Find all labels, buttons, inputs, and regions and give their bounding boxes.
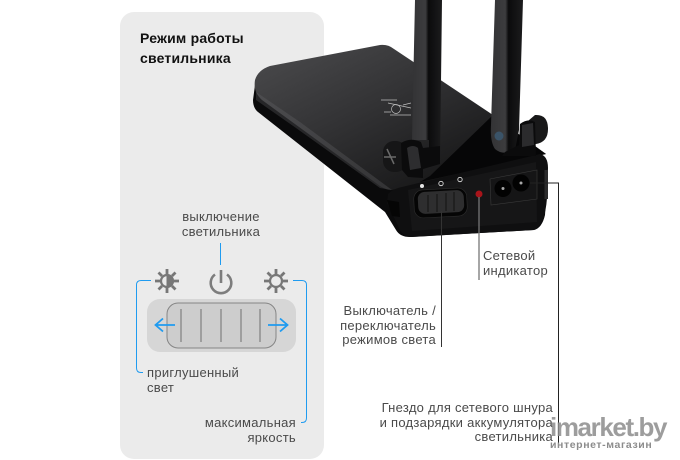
heading: light mode <box>140 30 244 66</box>
label: indicator: индикатор <box>483 262 548 278</box>
label: socket: Гнездо для сетевого шнура <box>382 400 553 415</box>
left arm <box>412 0 442 166</box>
panel: light mode <box>120 12 324 459</box>
socket <box>494 174 530 197</box>
label: dimmed light <box>147 365 239 394</box>
side notch <box>387 200 400 217</box>
label: indicator: Сетевой <box>483 248 535 263</box>
label: socket <box>380 400 553 444</box>
label: maximum brightness <box>205 415 296 444</box>
arrow: left <box>156 318 175 332</box>
arrow: right <box>268 318 288 332</box>
socket panel <box>490 170 537 205</box>
slider knob <box>167 303 276 348</box>
heading: light mode: Режим работы <box>140 30 244 46</box>
label: dimmed light: свет <box>147 380 174 394</box>
leader: socket <box>530 183 558 443</box>
base side <box>253 85 548 237</box>
heading: light mode: светильника <box>140 50 231 66</box>
leader: switch <box>440 211 442 347</box>
logo <box>381 100 411 115</box>
label: switch: режимов света <box>342 332 436 347</box>
switch icons <box>420 177 462 188</box>
label: socket: светильника <box>475 429 553 444</box>
leader: indicator <box>478 197 480 280</box>
label: maximum brightness: максимальная <box>205 415 296 430</box>
slider track <box>147 299 296 352</box>
switch slider <box>417 190 465 214</box>
watermark: imarket.by <box>550 412 666 442</box>
icon: bright sun <box>264 269 288 293</box>
label: switch <box>340 303 436 347</box>
leader: dimmed light <box>136 280 151 372</box>
switch housing <box>413 188 468 218</box>
icon: dimmed sun <box>155 269 179 293</box>
label: lamp off: выключение <box>182 209 260 224</box>
label: switch: переключатель <box>340 318 436 332</box>
leader: maximum brightness <box>293 280 306 422</box>
label: socket: и подзарядки аккумулятора <box>380 414 553 430</box>
label: maximum brightness: яркость <box>247 430 296 444</box>
base top <box>255 45 546 190</box>
right hinge <box>494 115 548 156</box>
icon: power <box>211 270 231 293</box>
left hinge <box>383 140 440 178</box>
label: switch: Выключатель / <box>344 303 436 318</box>
label: lamp off: светильника <box>182 224 260 238</box>
watermark: интернет-магазин <box>550 439 652 451</box>
label: lamp off <box>182 209 260 238</box>
side clip <box>544 170 548 199</box>
photo: lamp base <box>253 0 548 237</box>
label: indicator <box>483 248 548 278</box>
right arm <box>491 0 523 153</box>
end face <box>387 154 548 237</box>
leader: lamp off <box>220 243 222 265</box>
base reflection <box>420 116 546 182</box>
label: dimmed light: приглушенный <box>147 365 239 380</box>
end face inner <box>408 162 537 231</box>
base highlight <box>256 92 392 190</box>
indicator light <box>476 190 482 198</box>
